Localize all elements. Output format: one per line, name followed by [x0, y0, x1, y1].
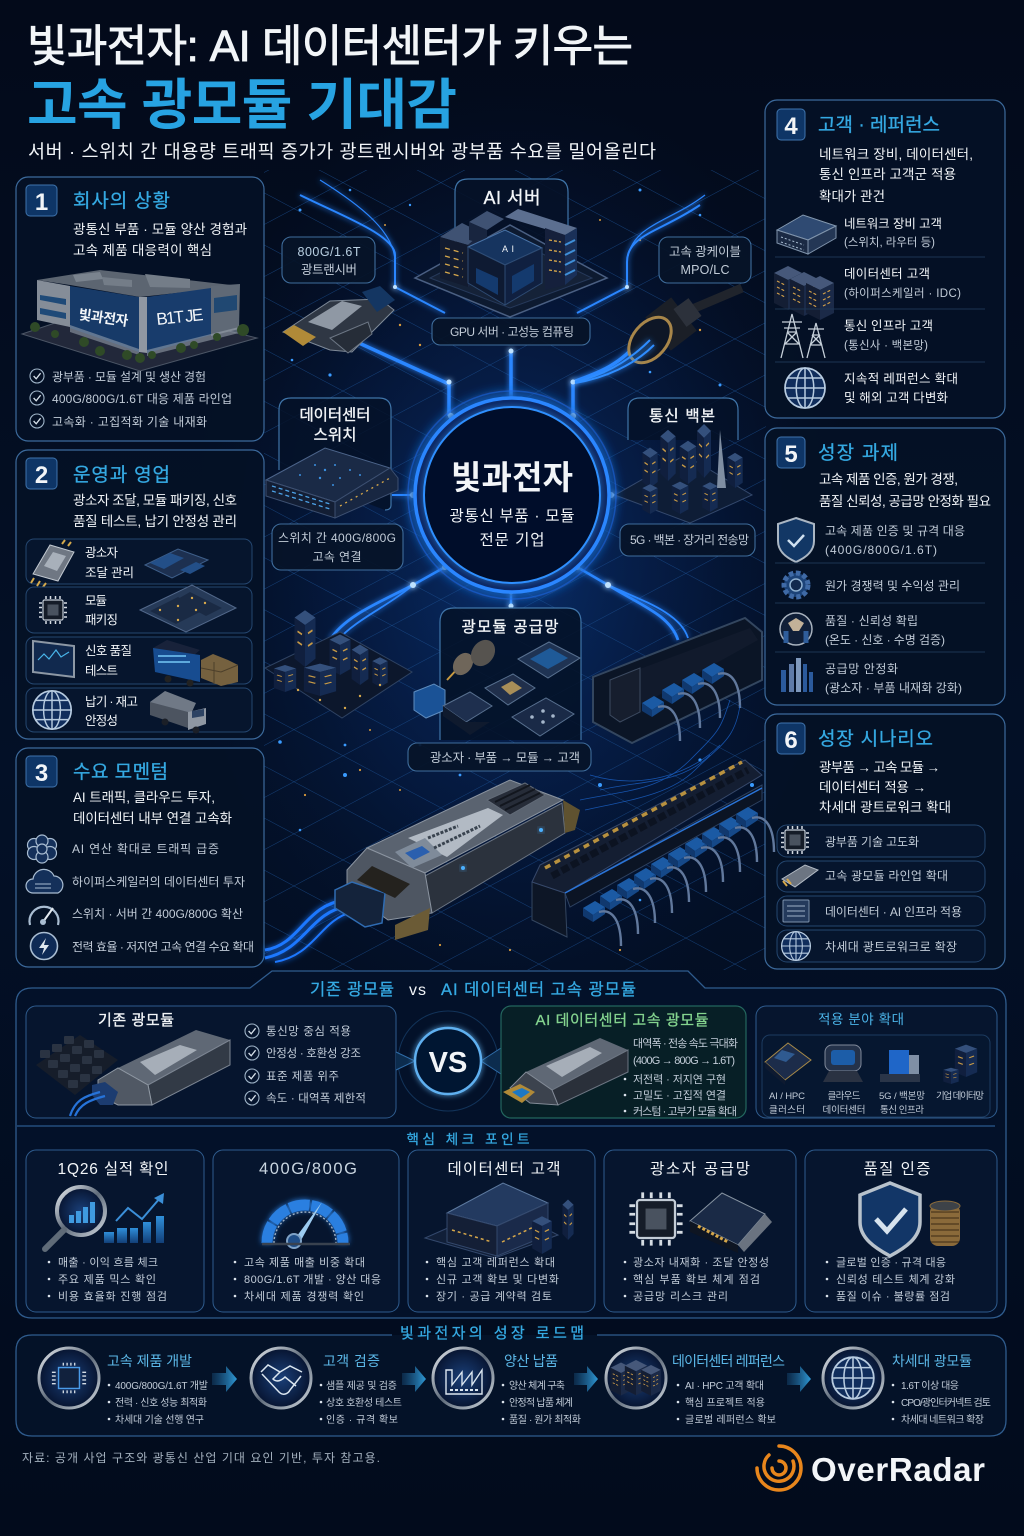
icon: cloud: [26, 869, 63, 893]
body 2: [73, 493, 237, 529]
card bullets: 매출 · 이익 흐름 체크: [58, 1256, 158, 1269]
card: 1Q26 results: 1Q26 실적 확인: [58, 1160, 168, 1178]
arrow 4: [787, 1366, 811, 1392]
application: 5G backbone: 5G / 백본망: [879, 1091, 925, 1102]
hub name: 빛과전자: [451, 459, 573, 496]
conventional checklist: 표준 제품 위주: [266, 1070, 339, 1083]
comparison heading: 기존 광모듈: [310, 980, 394, 999]
challenge: certification: 고속 제품 인증 및 규격 대응: [825, 524, 965, 538]
customer: data center: [844, 267, 961, 300]
source note: 자료: 공개 사업 구조와 광통신 산업 기대 요인 기반, 투자 참고용.: [22, 1451, 380, 1465]
node: optical transceiver: [282, 237, 395, 353]
illustration: transceiver module: [283, 286, 395, 353]
card bullets: 핵심 부품 확보 체계 점검: [633, 1273, 760, 1286]
step 4: data center reference: 핵심 프로젝트 적용: [685, 1397, 765, 1409]
heading 5: 성장 과제: [818, 442, 898, 464]
arrow 2: [402, 1366, 426, 1392]
illustration: conventional module: [36, 1030, 230, 1116]
number badge 1: [26, 185, 57, 216]
row: signal quality test: 테스트: [85, 664, 118, 678]
network connection lines: [300, 180, 705, 640]
step: data center application: 데이터센터 · AI 인프라 적용: [825, 905, 962, 919]
step 5: next-generation module: [823, 1348, 991, 1426]
challenge: certification: [825, 524, 965, 557]
step 4: data center reference: 데이터센터 레퍼런스: [672, 1353, 785, 1369]
number badge 3: 3: [35, 760, 48, 787]
body 6: 광부품 → 고속 모듈 →: [819, 760, 940, 775]
application: enterprise network: [936, 1045, 984, 1102]
step 1: product development: [39, 1348, 208, 1426]
challenge: supply chain: 공급망 안정화: [825, 662, 898, 676]
card: quality certification: [805, 1150, 997, 1312]
body 3: [73, 790, 232, 826]
illustration: network switch: [266, 448, 398, 518]
comparison and check-point section: [16, 971, 1006, 1318]
row: light source sourcing: [26, 539, 252, 587]
conventional checklist: [245, 1024, 366, 1105]
application: AI/HPC: AI / HPC: [769, 1091, 805, 1102]
card: data center customers: 데이터센터 고객: [448, 1160, 560, 1178]
node: optical transceiver: 광트랜시버: [301, 263, 357, 277]
step 3: mass production: 양산 납품: [504, 1353, 558, 1369]
body 2: 품질 테스트, 납기 안정성 관리: [73, 514, 237, 529]
icon: shield: [778, 518, 814, 562]
AI module features: (400G → 800G → 1.6T): [633, 1055, 735, 1067]
VS badge: [396, 1011, 501, 1111]
body 5: 고속 제품 인증, 원가 경쟁,: [819, 472, 958, 487]
card bullets: [826, 1256, 955, 1303]
caption: GPU server: [432, 318, 590, 345]
comparison heading: [310, 980, 636, 999]
caption: switch link: [272, 524, 403, 570]
step 5: next-generation module: 차세대 광모듈: [892, 1353, 972, 1369]
logo: OverRadar: [757, 1446, 985, 1490]
node: data center switch: [266, 398, 403, 570]
heading 6: 성장 시나리오: [818, 728, 933, 750]
step 1: product development: 차세대 기술 선행 연구: [115, 1414, 204, 1426]
icon: network equipment: [777, 215, 836, 254]
customer: data center: 데이터센터 고객: [844, 267, 930, 281]
card bullets: [624, 1256, 769, 1303]
application: 5G backbone: [879, 1050, 925, 1116]
item: AI compute: AI 연산 확대로 트래픽 급증: [72, 842, 219, 856]
panel 3: demand momentum: [16, 748, 264, 967]
application: AI/HPC: [765, 1043, 811, 1116]
heading 4: 고객 · 레퍼런스: [818, 114, 940, 136]
row: delivery and inventory: 납기 · 재고: [85, 695, 138, 709]
row: signal quality test: [26, 637, 252, 686]
challenge: quality: 품질 · 신뢰성 확립: [825, 614, 918, 628]
customer: overseas diversification: 지속적 레퍼런스 확대: [844, 372, 958, 386]
hub description: [450, 507, 574, 549]
step 3: mass production: 안정적 납품 체계: [509, 1397, 573, 1409]
card bullets: 신뢰성 테스트 체계 강화: [836, 1273, 955, 1286]
customer: data center: (하이퍼스케일러 · IDC): [844, 286, 961, 300]
icon: globe: [785, 368, 825, 408]
card: optical source supply: [604, 1150, 796, 1312]
challenge: supply chain: [825, 662, 962, 695]
AI module features: 저전력 · 저지연 구현: [633, 1073, 726, 1086]
body 2: 광소자 조달, 모듈 패키징, 신호: [73, 493, 237, 508]
body 3: AI 트래픽, 클라우드 투자,: [73, 790, 215, 805]
step 4: data center reference: 글로벌 레퍼런스 확보: [685, 1414, 776, 1426]
heading 2: 운영과 영업: [73, 464, 170, 486]
step: data center application: [777, 896, 985, 926]
hub description: 전문 기업: [480, 531, 544, 549]
body 4: [819, 147, 973, 204]
row: module packaging: 패키징: [85, 613, 118, 627]
caption: switch link: 스위치 간 400G/800G: [278, 531, 396, 545]
icon: transmission towers: [781, 314, 825, 358]
card bullets: 공급망 리스크 관리: [633, 1290, 728, 1303]
conventional checklist: 속도 · 대역폭 제한적: [266, 1092, 366, 1105]
row: light source sourcing: 광소자: [85, 546, 118, 560]
step 3: mass production: 양산 체계 구축: [509, 1380, 565, 1392]
applications heading: 적용 분야 확대: [818, 1012, 904, 1027]
card bullets: 고속 제품 매출 비중 확대: [244, 1256, 365, 1269]
arrow 1: [212, 1366, 237, 1392]
illustration: optical components: [414, 635, 580, 736]
item: hyperscaler investment: 하이퍼스케일러의 데이터센터 투자: [72, 875, 245, 889]
step 2: customer validation: [251, 1348, 402, 1426]
node: data center switch: 스위치: [314, 426, 356, 444]
customer: network equipment: (스위치, 라우터 등): [844, 236, 935, 249]
AI module features: 고밀도 · 고집적 연결: [633, 1089, 726, 1102]
panel 4: customers and references: [765, 100, 1005, 418]
caption: backbone: [620, 524, 755, 556]
illustration: AI server cluster: AI: [502, 244, 514, 254]
panel 6: growth scenario: [765, 714, 1005, 969]
caption: value chain: [408, 743, 591, 771]
check points heading: 핵심 체크 포인트: [406, 1132, 530, 1147]
node: optical cable: MPO/LC: [680, 263, 730, 277]
body 4: 네트워크 장비, 데이터센터,: [819, 147, 973, 162]
body 1: [73, 222, 247, 258]
illustration: large optical transceiver: [265, 780, 580, 962]
node: optical cable: [575, 237, 751, 383]
illustration: city backbone: [615, 424, 752, 523]
body 5: [819, 472, 991, 509]
arrow 3: [574, 1366, 598, 1392]
step: next-gen network: [777, 930, 985, 962]
step 1: product development: 400G/800G/1.6T 개발: [115, 1380, 208, 1392]
row: delivery and inventory: [26, 688, 252, 734]
node: optical module supply chain: [408, 608, 591, 771]
caption: backbone: 5G · 백본 · 장거리 전송망: [630, 533, 749, 547]
body 6: 차세대 광트로워크 확대: [819, 800, 951, 815]
application: enterprise network: 기업 데이터망: [936, 1090, 984, 1102]
node: optical cable: 고속 광케이블: [669, 245, 741, 259]
icon: speedometer: [262, 1202, 350, 1248]
fiber strands: [580, 700, 740, 810]
row: light source sourcing: 조달 관리: [85, 566, 134, 580]
customer: network equipment: 네트워크 장비 고객: [844, 217, 942, 231]
icon: chip and board: [629, 1192, 772, 1253]
step 1: product development: 전력 · 신호 성능 최적화: [115, 1397, 207, 1409]
icon: magnifier and bars: [45, 1187, 164, 1249]
card bullets: 비용 효율화 진행 점검: [58, 1290, 167, 1303]
step: component technology: 광부품 기술 고도화: [825, 835, 919, 849]
step 2: customer validation: 샘플 제공 및 검증: [326, 1380, 397, 1392]
caption: value chain: 광소자 · 부품 → 모듈 → 고객: [430, 751, 580, 765]
challenge: supply chain: (광소자 · 부품 내재화 강화): [825, 681, 962, 695]
heading 3: 수요 모멘텀: [73, 761, 168, 783]
card bullets: 핵심 고객 레퍼런스 확대: [436, 1256, 555, 1269]
card: data center customers: [408, 1150, 595, 1312]
customer: telecom infrastructure: 통신 인프라 고객: [844, 319, 933, 333]
node: telecom backbone: 통신 백본: [649, 407, 715, 425]
body 6: [819, 760, 951, 815]
comparison heading: AI 데이터센터 고속 광모듈: [441, 980, 636, 999]
challenge: quality: (온도 · 신호 · 수명 검증): [825, 633, 945, 647]
card bullets: 신규 고객 확보 및 다변화: [436, 1273, 559, 1286]
panel 1: company: [16, 177, 264, 441]
step 4: data center reference: AI · HPC 고객 확대: [685, 1380, 764, 1392]
conventional checklist: 통신망 중심 적용: [266, 1025, 351, 1038]
application: AI/HPC: 클러스터: [769, 1105, 805, 1116]
panel: conventional module: [26, 1006, 396, 1118]
body 4: 확대가 관건: [819, 189, 885, 204]
panel 2: operations and sales: [16, 450, 264, 739]
illustration: switch port row with cables: [532, 760, 774, 946]
panel: expanding applications: [756, 1006, 997, 1118]
caption: GPU server: GPU 서버 · 고성능 컴퓨팅: [450, 325, 574, 339]
caption: switch link: 고속 연결: [312, 550, 362, 564]
card: optical source supply: 광소자 공급망: [650, 1160, 750, 1178]
step 5: next-generation module: CPO/광인터커넥트 검토: [901, 1397, 991, 1409]
icon: data center block: [425, 1183, 574, 1258]
number badge 6: [777, 723, 805, 754]
icon: shield and coins: [860, 1183, 960, 1256]
checklist 1: [30, 369, 232, 429]
number badge 1: 1: [35, 189, 48, 216]
body 1: 고속 제품 대응력이 핵심: [73, 243, 212, 258]
node: AI server: AI 서버: [484, 188, 540, 208]
icon: brain: [28, 835, 56, 863]
AI module features: [624, 1037, 738, 1118]
illustration: headquarters building: B1T JE: [155, 305, 204, 329]
body 4: 통신 인프라 고객군 적용: [819, 167, 956, 182]
step 2: customer validation: 상호 호환성 테스트: [326, 1397, 402, 1409]
icon: supply chain towers: [781, 658, 813, 692]
application: 5G backbone: 통신 인프라: [880, 1105, 924, 1116]
step 3: mass production: [433, 1348, 581, 1426]
step 3: mass production: 품질 · 원가 최적화: [509, 1414, 581, 1426]
card bullets: 차세대 제품 경쟁력 확인: [244, 1290, 364, 1303]
conventional checklist: 안정성 · 호환성 강조: [266, 1047, 361, 1060]
customer: telecom infrastructure: (통신사 · 백본망): [844, 339, 928, 352]
illustration: MPO connector: [575, 288, 742, 383]
panel: AI data center module: [501, 1006, 746, 1118]
card: quality certification: 품질 인증: [864, 1160, 930, 1178]
card bullets: 품질 이슈 · 불량률 점검: [836, 1290, 950, 1303]
card bullets: [234, 1256, 381, 1303]
VS badge: VS: [429, 1047, 467, 1079]
card: 400G/800G: 400G/800G: [259, 1160, 357, 1178]
number badge 3: [26, 756, 57, 787]
heading 1: 회사의 상황: [73, 190, 170, 212]
item: 400G/800G spread: 스위치 · 서버 간 400G/800G 확산: [72, 907, 243, 921]
step 2: customer validation: 고객 검증: [323, 1353, 380, 1369]
card bullets: [426, 1256, 559, 1303]
card bullets: 800G/1.6T 개발 · 양산 대응: [244, 1273, 381, 1286]
conventional heading: 기존 광모듈: [98, 1012, 174, 1029]
icon: lightning: [30, 932, 58, 960]
node: optical transceiver: 800G/1.6T: [298, 245, 361, 259]
roadmap section: [16, 1325, 1006, 1436]
node: AI server: [415, 179, 607, 345]
comparison heading: vs: [409, 982, 426, 999]
illustration: AI module: [503, 1038, 628, 1105]
title: 고속 광모듈 기대감: [27, 74, 457, 136]
card bullets: 광소자 내재화 · 조달 안정성: [633, 1256, 769, 1269]
illustration: AI server cluster: [415, 209, 607, 317]
step: next-gen network: 차세대 광트로워크로 확장: [825, 940, 957, 954]
customer: overseas diversification: 및 해외 고객 다변화: [844, 391, 948, 405]
icon: data center racks: [774, 266, 834, 320]
checklist 1: 고속화 · 고집적화 기술 내재화: [52, 415, 207, 429]
checklist 1: 광부품 · 모듈 설계 및 생산 경험: [52, 370, 206, 384]
AI module features: 커스텀 · 고부가 모듈 확대: [633, 1105, 737, 1118]
card bullets: 장기 · 공급 계약력 검토: [436, 1289, 552, 1303]
challenge: certification: (400G/800G/1.6T): [825, 543, 937, 557]
illustration: patch panel with cables: [593, 618, 762, 743]
card: 1Q26 results: [26, 1150, 204, 1312]
number badge 2: 2: [35, 462, 48, 489]
body 1: 광통신 부품 · 모듈 양산 경험과: [73, 222, 247, 237]
roadmap heading: 빛과전자의 성장 로드맵: [400, 1325, 584, 1342]
body 5: 품질 신뢰성, 공급망 안정화 필요: [819, 494, 991, 509]
step: module lineup: [777, 861, 985, 892]
icon: quality badge: [780, 613, 812, 645]
icon: speed gauge: [30, 907, 58, 925]
illustration: lower left data center city: [265, 610, 412, 718]
step 2: customer validation: 인증 · 규격 확보: [326, 1413, 398, 1426]
checklist 1: 400G/800G/1.6T 대응 제품 라인업: [52, 392, 232, 406]
body 3: 데이터센터 내부 연결 고속화: [73, 811, 232, 826]
step 5: next-generation module: 차세대 네트워크 확장: [901, 1413, 984, 1426]
logo: OverRadar: OverRadar: [811, 1451, 985, 1488]
step 4: data center reference: [606, 1348, 785, 1426]
step 1: product development: 고속 제품 개발: [107, 1353, 192, 1369]
title: [27, 22, 633, 136]
hub description: 광통신 부품 · 모듈: [450, 507, 574, 525]
step 5: next-generation module: 1.6T 이상 대응: [901, 1380, 959, 1392]
illustration: headquarters building: [22, 270, 257, 371]
title: 빛과전자: AI 데이터센터가 키우는: [27, 22, 633, 71]
subtitle: 서버 · 스위치 간 대용량 트래픽 증가가 광트랜시버와 광부품 수요를 밀어올린다: [28, 141, 656, 162]
number badge 2: [26, 458, 57, 489]
AI module heading: AI 데이터센터 고속 광모듈: [536, 1012, 708, 1029]
step: component technology: [777, 825, 985, 857]
body 6: 데이터센터 적용 →: [819, 780, 926, 795]
number badge 5: [777, 437, 805, 468]
item: power efficiency: 전력 효율 · 저지연 고속 연결 수요 확대: [72, 940, 254, 954]
card bullets: 주요 제품 믹스 확인: [58, 1273, 156, 1286]
application: cloud data center: 데이터센터: [822, 1105, 866, 1116]
customer: network equipment: [844, 217, 942, 249]
challenge: cost: 원가 경쟁력 및 수익성 관리: [825, 579, 960, 593]
customer: telecom infrastructure: [844, 319, 933, 352]
node: telecom backbone: [615, 398, 755, 556]
application: cloud data center: 클라우드: [828, 1091, 861, 1102]
number badge 4: [777, 109, 805, 140]
number badge 6: 6: [784, 727, 798, 754]
card bullets: [48, 1256, 167, 1303]
row: signal quality test: 신호 품질: [85, 644, 132, 658]
card: 400G/800G: [213, 1150, 399, 1312]
central hub: company: [408, 391, 616, 599]
icon: gear: [784, 573, 808, 597]
number badge 4: 4: [784, 113, 798, 140]
step: module lineup: 고속 광모듈 라인업 확대: [825, 869, 948, 883]
node: optical module supply chain: 광모듈 공급망: [462, 618, 558, 636]
card bullets: 글로벌 인증 · 규격 대응: [836, 1256, 946, 1269]
AI module features: 대역폭 · 전송 속도 극대화: [633, 1037, 738, 1050]
node: data center switch: 데이터센터: [300, 406, 370, 424]
customer: overseas diversification: [844, 372, 958, 405]
panel 5: growth challenges: [765, 428, 1005, 705]
application: cloud data center: [822, 1045, 866, 1116]
row: module packaging: 모듈: [85, 594, 107, 608]
row: delivery and inventory: 안정성: [85, 714, 118, 728]
number badge 5: 5: [784, 441, 798, 468]
illustration: headquarters building: 빛과전자: [78, 306, 129, 329]
challenge: quality: [825, 614, 945, 647]
row: module packaging: [26, 585, 252, 633]
